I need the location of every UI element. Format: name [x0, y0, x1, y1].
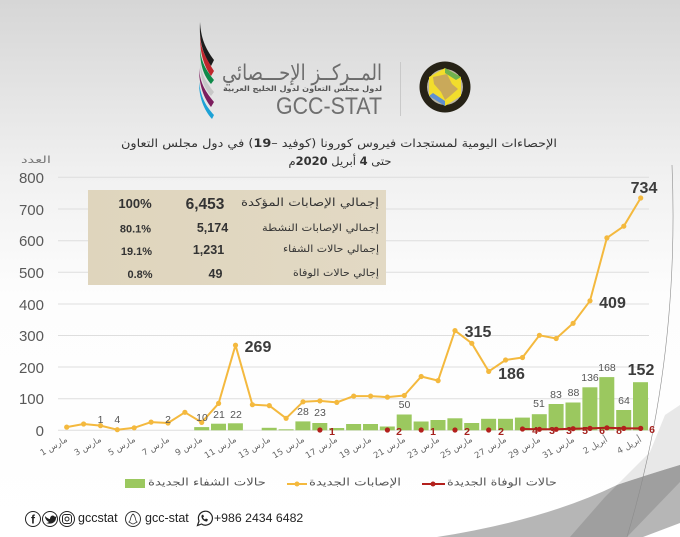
row: recovered: إجمالي حالات الشفاء — [283, 244, 379, 255]
data labels: highlighted peaks: 409 — [599, 295, 626, 312]
data labels: deaths: 2 — [498, 426, 504, 438]
y axis labels — [19, 170, 44, 440]
y axis labels: 200 — [19, 360, 44, 377]
x axis date labels — [39, 433, 644, 461]
data labels: recoveries and small counts: 64 — [618, 395, 630, 407]
y axis labels: 800 — [19, 170, 44, 187]
x axis date labels: أبريل 2 — [581, 433, 610, 457]
data labels: recoveries and small counts: 88 — [568, 387, 579, 399]
x axis date labels: مارس 21 — [372, 435, 408, 461]
legend: new deaths: حالات الوفاة الجديدة — [447, 476, 557, 488]
row: total confirmed: إجمالي الإصابات المؤكدة — [241, 196, 379, 209]
data labels: highlighted peaks: 269 — [245, 339, 271, 356]
handle: gcc-stat: gcc-stat — [145, 511, 189, 525]
x axis date labels: مارس 17 — [304, 435, 340, 461]
x axis date labels: مارس 9 — [174, 435, 204, 458]
legend: new cases — [287, 476, 401, 488]
logo: Arabic subtitle: لدول مجلس التعاون لدول الخليج العربية — [223, 84, 382, 93]
icon: snapchat — [126, 512, 140, 526]
axis title: العدد — [21, 155, 51, 166]
icon: facebook — [26, 512, 40, 526]
icon: twitter — [42, 512, 58, 526]
x axis date labels: مارس 3 — [73, 435, 104, 458]
data labels: recoveries and small counts: 21 — [213, 409, 225, 421]
row: deaths: إجالي حالات الوفاة — [293, 268, 379, 279]
data labels: deaths: 2 — [464, 426, 470, 438]
legend: recoveries: حالات الشفاء الجديدة — [148, 476, 266, 488]
x axis date labels: مارس 1 — [39, 435, 70, 458]
x axis date labels: مارس 13 — [237, 435, 272, 461]
icon: GCC emblem — [420, 62, 470, 112]
data labels: deaths: 4 — [532, 425, 538, 437]
legend: recoveries — [125, 476, 266, 488]
x axis date labels: مارس 25 — [439, 435, 474, 461]
data labels: recoveries and small counts: 28 — [297, 406, 309, 418]
title: حتى 4 أبريل 2020م — [289, 153, 391, 169]
row: active: 5,174 — [197, 221, 228, 235]
panel: summary table — [88, 190, 386, 285]
data labels: recoveries and small counts: 2 — [165, 414, 171, 426]
data labels: recoveries and small counts: 10 — [196, 412, 208, 424]
row: active — [120, 221, 379, 236]
y axis labels: 300 — [19, 328, 44, 345]
row: recovered — [121, 243, 379, 258]
legend — [125, 476, 557, 488]
data labels: deaths — [329, 424, 655, 438]
data labels: deaths: 3 — [549, 425, 555, 437]
row: total confirmed: 6,453 — [186, 196, 225, 213]
x axis date labels: مارس 27 — [473, 435, 508, 461]
decorative swoosh — [437, 165, 680, 537]
legend: new cases: الإصابات الجديدة — [309, 476, 401, 488]
data labels: recoveries and small counts: 22 — [230, 409, 242, 421]
title — [121, 136, 557, 169]
data labels: deaths: 1 — [430, 426, 436, 438]
data labels: deaths: 2 — [396, 426, 402, 438]
title: الإحصاءات اليومية لمستجدات فيروس كورونا (كوفيد –19) في دول مجلس التعاون — [121, 136, 557, 151]
gridlines — [58, 177, 649, 430]
bar chart: new recoveries — [194, 377, 648, 430]
row: total confirmed — [118, 196, 379, 213]
row: deaths: 49 — [209, 267, 222, 281]
logo: Arabic name: المــركــز الإحـــصائي — [222, 61, 382, 86]
icon: facebook: f — [31, 512, 36, 526]
x axis date labels: مارس 29 — [507, 435, 542, 461]
x axis date labels: مارس 19 — [338, 435, 374, 461]
data labels: highlighted peaks: 152 — [628, 362, 654, 379]
phone number: +986 2434 6482 — [214, 511, 303, 525]
data labels: highlighted peaks: 734 — [631, 180, 657, 197]
row: active: 80.1% — [120, 224, 151, 236]
data labels: recoveries and small counts — [98, 362, 630, 426]
y axis labels: 400 — [19, 297, 44, 314]
data labels: recoveries and small counts: 168 — [598, 362, 616, 374]
data labels: recoveries and small counts: 136 — [581, 372, 599, 384]
data labels: deaths: 5 — [582, 425, 588, 437]
data labels: highlighted peaks: 315 — [465, 324, 491, 341]
logo: GCC-STAT wordmark: GCC-STAT — [276, 93, 382, 120]
x axis date labels: مارس 23 — [406, 435, 442, 461]
row: deaths — [127, 267, 379, 281]
data labels: deaths: 1 — [329, 426, 335, 438]
data labels: deaths: 6 — [599, 425, 605, 437]
y axis labels: 500 — [19, 265, 44, 282]
x axis date labels: مارس 7 — [141, 435, 172, 458]
data labels: recoveries and small counts: 4 — [114, 414, 120, 426]
data labels: recoveries and small counts: 83 — [550, 389, 562, 401]
y axis labels: 0 — [36, 423, 44, 440]
data labels: deaths: 3 — [566, 425, 572, 437]
icon: instagram — [60, 512, 74, 526]
y axis labels: 600 — [19, 233, 44, 250]
row: active: إجمالي الإصابات النشطة — [262, 223, 379, 234]
y axis labels: 700 — [19, 202, 44, 219]
data labels: recoveries and small counts: 23 — [314, 407, 326, 419]
data labels: deaths: 8 — [616, 425, 622, 437]
x axis date labels: مارس 11 — [203, 435, 238, 461]
data labels: recoveries and small counts: 51 — [533, 398, 545, 410]
data labels: highlighted peaks — [245, 180, 657, 383]
data labels: recoveries and small counts: 1 — [98, 414, 104, 426]
row: deaths: 0.8% — [127, 269, 153, 281]
data labels: highlighted peaks: 186 — [498, 366, 525, 383]
footer: social handles — [26, 511, 303, 526]
y axis labels: 100 — [19, 391, 44, 408]
x axis date labels: مارس 31 — [541, 435, 576, 461]
icon: whatsapp — [198, 511, 212, 526]
x axis date labels: مارس 5 — [107, 435, 138, 458]
logo: ribbon mark — [199, 22, 214, 119]
row: recovered: 19.1% — [121, 246, 152, 258]
line chart: new deaths — [317, 425, 643, 433]
row: total confirmed: 100% — [118, 196, 152, 211]
line chart: new cases — [64, 195, 643, 432]
x axis date labels: أبريل 4 — [615, 433, 644, 457]
handle: gccstat: gccstat — [78, 511, 118, 525]
x axis date labels: مارس 15 — [271, 435, 306, 461]
legend: new deaths — [422, 476, 557, 488]
data labels: recoveries and small counts: 50 — [399, 399, 410, 411]
data labels: deaths: 6 — [649, 424, 655, 436]
row: recovered: 1,231 — [193, 243, 224, 257]
